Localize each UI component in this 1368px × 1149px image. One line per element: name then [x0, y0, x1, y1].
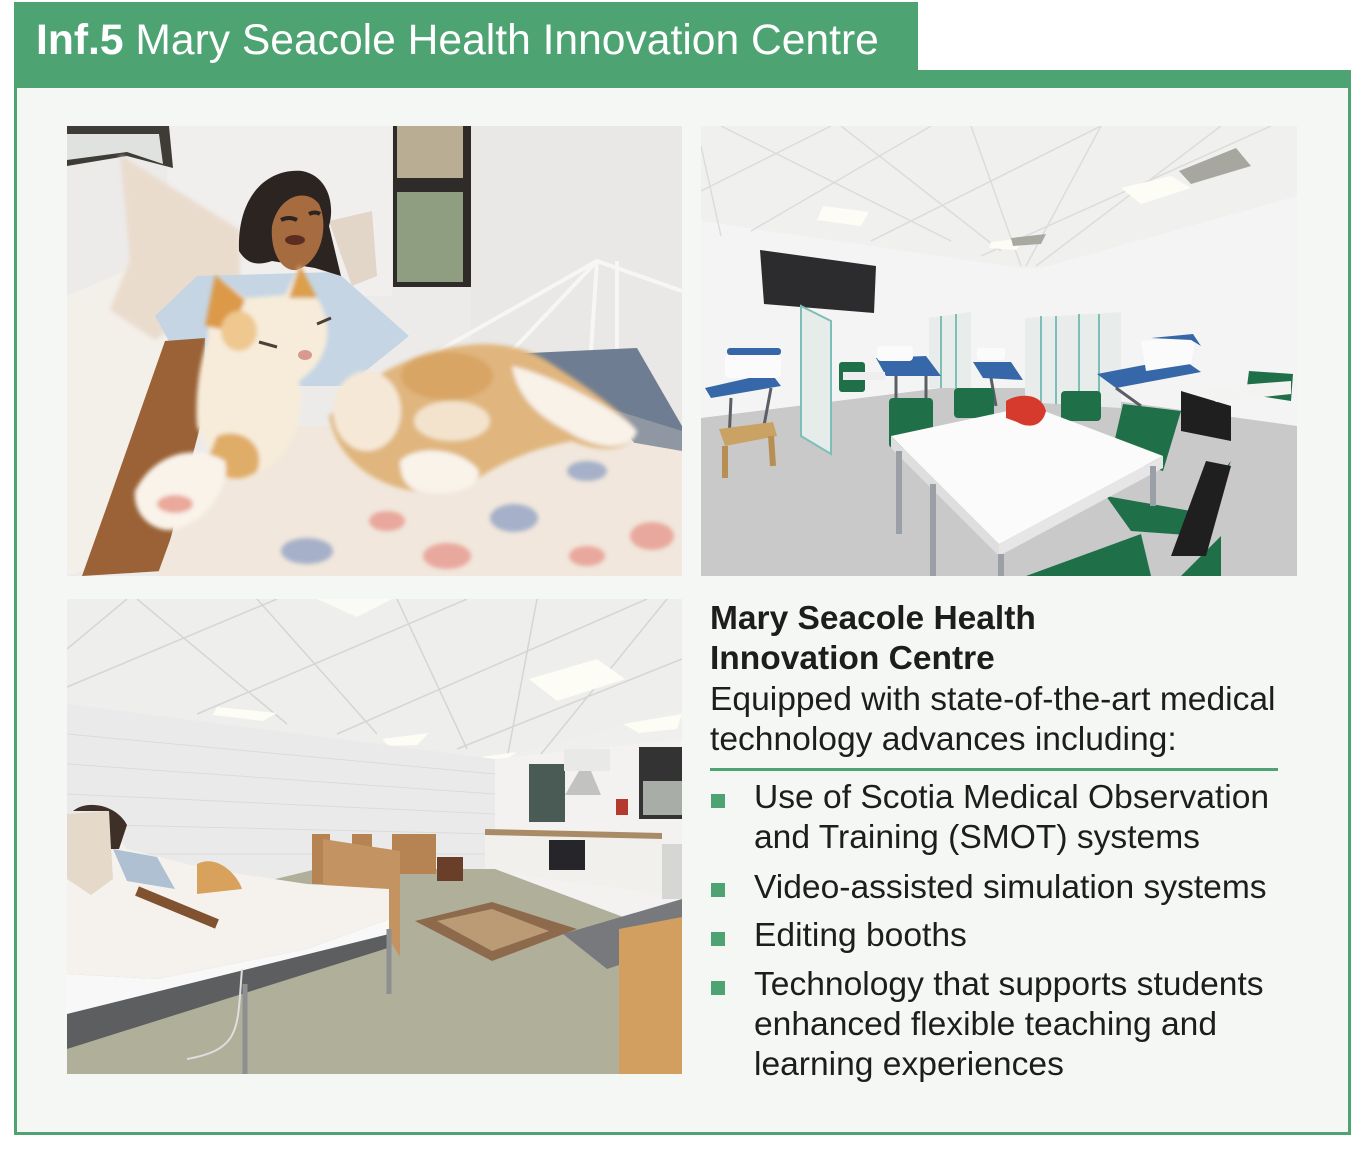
- title: Inf.5 Mary Seacole Health Innovation Centre: [36, 16, 879, 64]
- bullet 2: [711, 883, 725, 897]
- photo: teaching room with beds and table: [701, 126, 1297, 576]
- bullet list: learning experiences: [754, 1046, 1064, 1083]
- bullet list: Editing booths: [754, 917, 967, 954]
- intro text: technology advances including:: [710, 721, 1177, 758]
- bullet list: [711, 779, 1269, 1083]
- heading: Innovation Centre: [710, 640, 995, 677]
- photo: robotic cat on manikin's bed: [67, 126, 682, 576]
- bullet 3: [711, 932, 725, 946]
- bullet list: Video-assisted simulation systems: [754, 869, 1267, 906]
- bullet list: Use of Scotia Medical Observation: [754, 779, 1269, 816]
- bullet 4: [711, 981, 725, 995]
- intro text: Equipped with state-of-the-art medical: [710, 681, 1276, 718]
- heading: [710, 600, 1036, 677]
- bullet list: Technology that supports students: [754, 966, 1264, 1003]
- heading: Mary Seacole Health: [710, 600, 1036, 637]
- text block: centre heading and intro: [710, 600, 1276, 758]
- bullet list: and Training (SMOT) systems: [754, 819, 1200, 856]
- photo: simulated home care room: [67, 599, 682, 1074]
- header band: [14, 70, 1351, 88]
- bullet 1: [711, 794, 725, 808]
- bullet list: enhanced flexible teaching and: [754, 1006, 1217, 1043]
- title: [14, 2, 918, 70]
- intro text: [710, 681, 1276, 758]
